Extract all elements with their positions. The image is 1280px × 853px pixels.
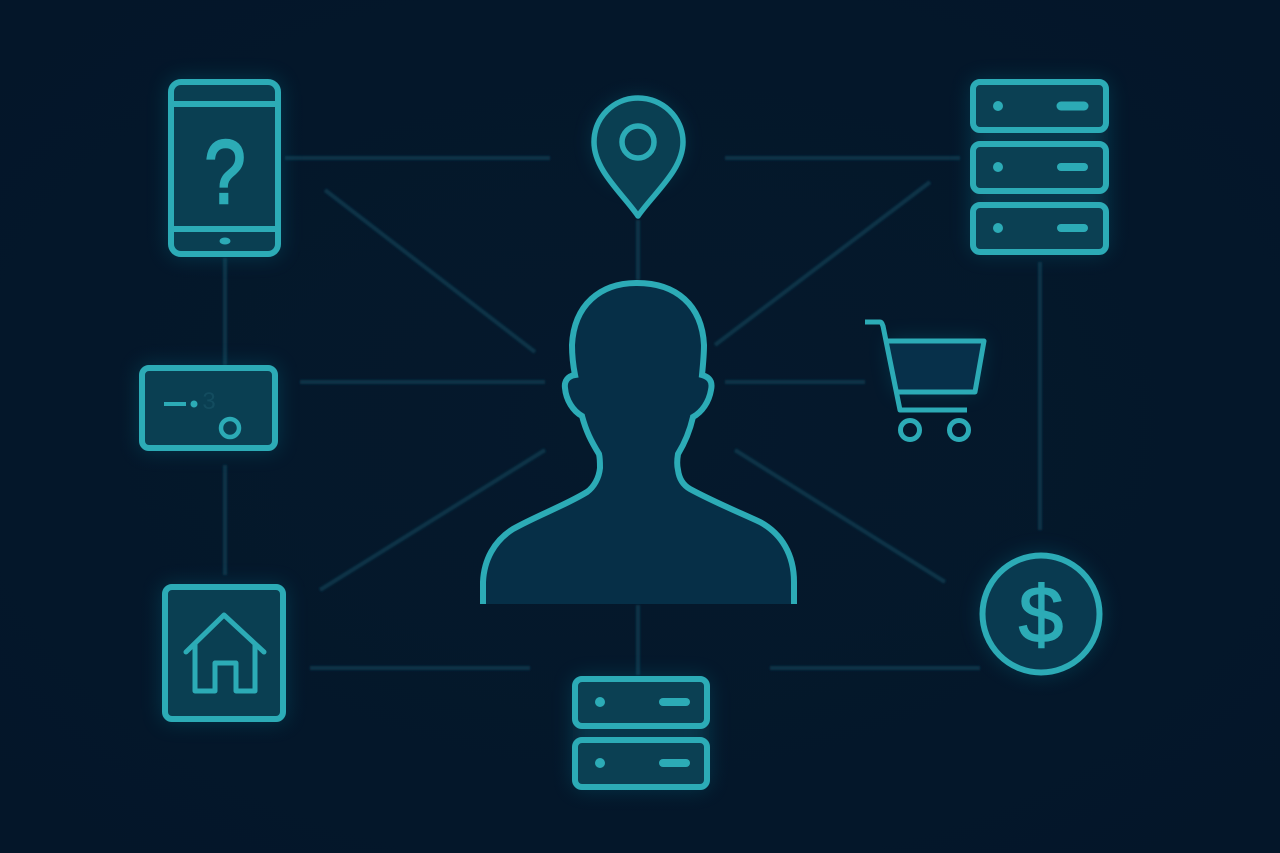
server row 1 [575,679,707,726]
icon: house panel [165,587,283,719]
icon glow halos [139,79,1108,789]
icon: server stack top right [973,82,1106,252]
icon: server stack bottom [575,679,707,787]
server row 3 [973,205,1106,252]
icon: shopping cart [865,322,984,440]
server row 2 [973,144,1106,191]
icon: person silhouette [483,283,794,604]
dollar sign: $ [1019,570,1063,659]
server row 2 [575,740,707,787]
icon: dollar coin [982,556,1100,672]
faint digit: 3 [202,388,216,415]
server row 1 [973,82,1106,130]
connector lines [225,158,1040,675]
icon: card [142,368,275,448]
icon: phone with question mark [171,82,278,254]
icon: location pin [594,98,683,216]
question mark: ? [204,123,246,223]
